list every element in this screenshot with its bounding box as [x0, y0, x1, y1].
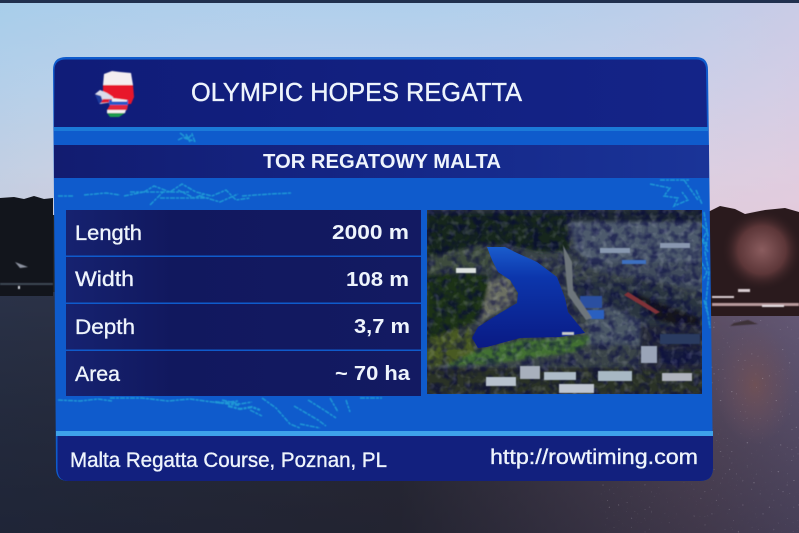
row: depth — [66, 304, 421, 350]
title: OLYMPIC HOPES REGATTA — [191, 79, 522, 107]
footer website: http://rowtiming.com — [490, 445, 698, 469]
row: area: Area — [75, 362, 120, 386]
background: sky — [0, 0, 799, 215]
aerial photo of lake — [427, 210, 702, 394]
header bar — [54, 60, 707, 127]
scoreboard panel — [53, 57, 713, 481]
footer location: Malta Regatta Course, Poznan, PL — [70, 449, 387, 472]
footer bar — [58, 436, 713, 481]
row: length — [66, 210, 421, 256]
row: length: Length — [75, 221, 142, 245]
decorative water pattern — [58, 133, 710, 428]
background: shore details — [0, 262, 799, 326]
subtitle: TOR REGATOWY MALTA — [263, 151, 501, 173]
row: length: 2000 m — [332, 221, 409, 244]
row: depth: Depth — [75, 315, 135, 339]
row: area — [66, 351, 421, 396]
row: depth: 3,7 m — [354, 315, 410, 338]
lake — [472, 247, 585, 348]
subtitle band — [54, 145, 709, 178]
row: width: Width — [75, 267, 134, 291]
photo buildings — [456, 243, 700, 393]
light stripe under header — [54, 127, 708, 131]
background: left tree line — [0, 196, 53, 296]
row: width: 108 m — [346, 268, 409, 291]
logo: flag-coloured map — [95, 71, 134, 117]
photo texture — [427, 210, 702, 394]
footer line — [56, 431, 713, 436]
row: area: ~ 70 ha — [335, 362, 411, 385]
background: water — [0, 292, 799, 533]
background: right tree line — [708, 206, 799, 316]
row: width — [66, 257, 421, 302]
